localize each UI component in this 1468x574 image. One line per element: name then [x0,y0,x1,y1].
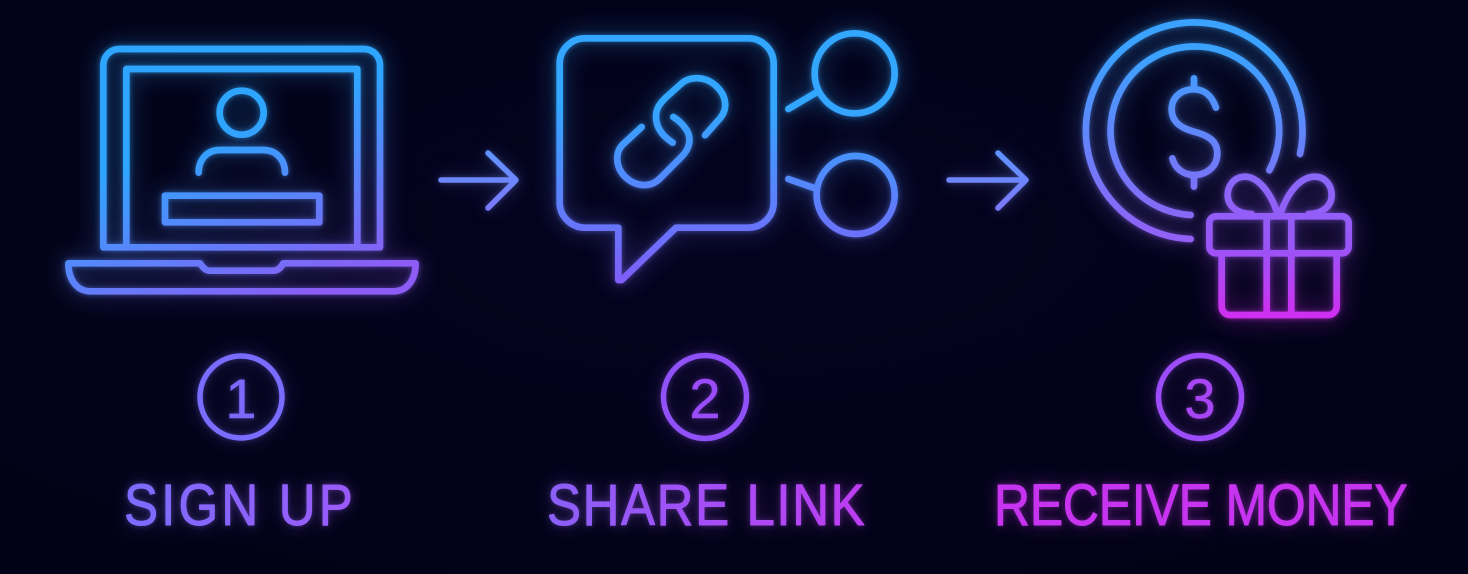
icon: speech bubble with link and share nodes [560,33,895,280]
icon: laptop with user profile [68,49,416,291]
arrow: step one to step two [441,153,516,208]
connector top [788,93,816,109]
step 2 badge [664,356,746,438]
label: receive money: RECEIVE MONEY [994,474,1408,538]
speech bubble [560,38,774,280]
connector bottom [788,179,815,188]
user head [220,91,264,135]
arrow: step two to step three [949,153,1026,208]
step 3 badge: 3 [1184,367,1216,430]
laptop base [68,263,416,291]
step 3 badge [1158,356,1242,438]
coin inner ring [1111,46,1279,215]
label: share link: SHARE LINK [547,473,865,538]
step 2 badge: 2 [689,367,721,430]
step 1 badge [200,356,282,438]
icon: dollar coin with gift box [1086,22,1349,315]
gift body [1222,253,1337,315]
dollar sign [1172,78,1217,187]
user shoulders [199,150,285,173]
input field [165,196,319,222]
gift bow [1228,177,1332,214]
coin outer ring [1086,22,1303,239]
laptop screen [126,69,357,247]
chain link lower [617,117,689,185]
chain link upper [656,78,725,143]
gift ribbon [1267,216,1291,315]
gift lid [1209,216,1349,253]
laptop lid [103,49,380,247]
share node bottom [817,156,895,234]
step 1 badge: 1 [225,367,257,430]
share node top [815,33,895,113]
label: sign up: SIGN UP [124,473,353,538]
